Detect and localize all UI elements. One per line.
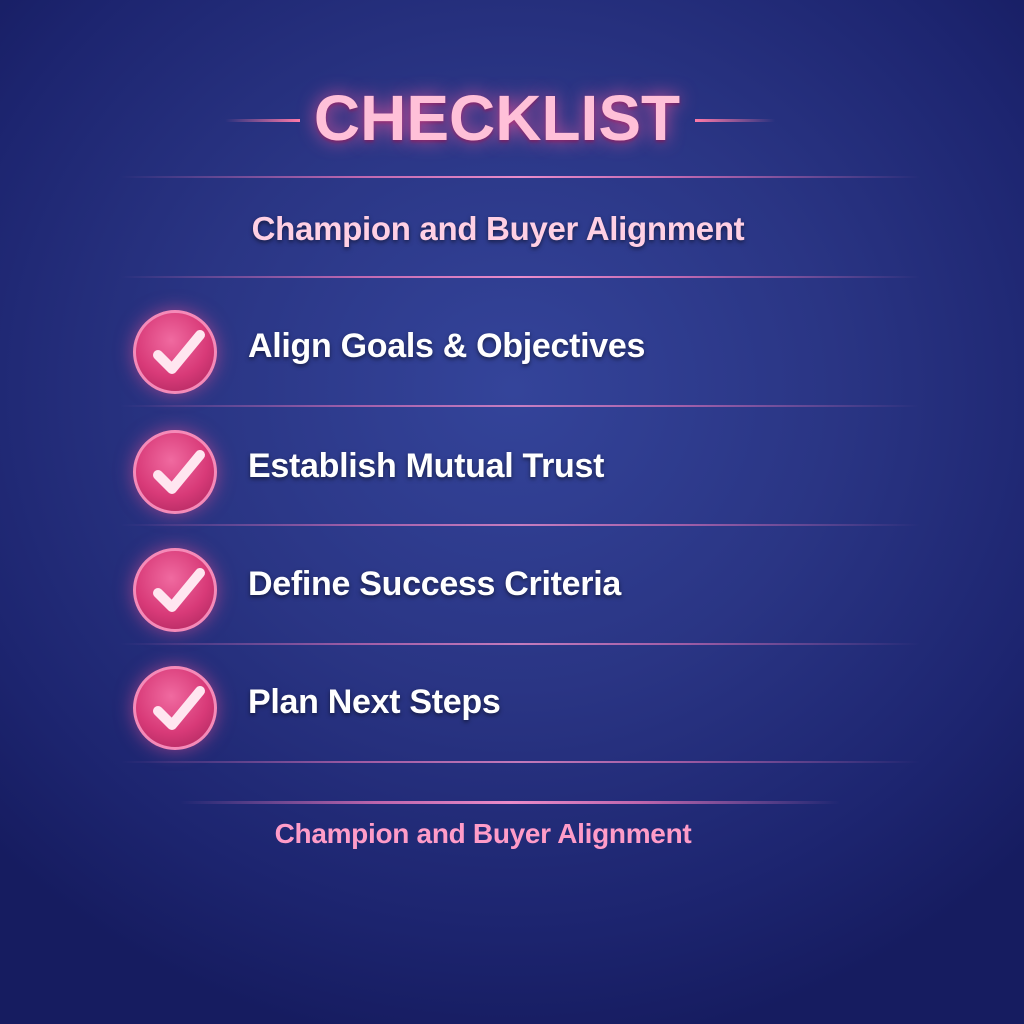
item 3: Define Success Criteria: [248, 565, 621, 603]
checklist items: [122, 298, 904, 761]
item 1: [122, 298, 646, 405]
item 2: [122, 418, 606, 525]
item 1: Align Goals & Objectives: [248, 327, 645, 365]
title: [228, 82, 772, 154]
item 4: [122, 654, 502, 761]
item 3: [122, 536, 623, 643]
subtitle: Champion and Buyer Alignment: [252, 210, 744, 247]
title: CHECKLIST: [314, 82, 680, 154]
footer text: Champion and Buyer Alignment: [275, 818, 691, 849]
item 4: Plan Next Steps: [248, 683, 500, 721]
item 2: Establish Mutual Trust: [248, 447, 604, 485]
